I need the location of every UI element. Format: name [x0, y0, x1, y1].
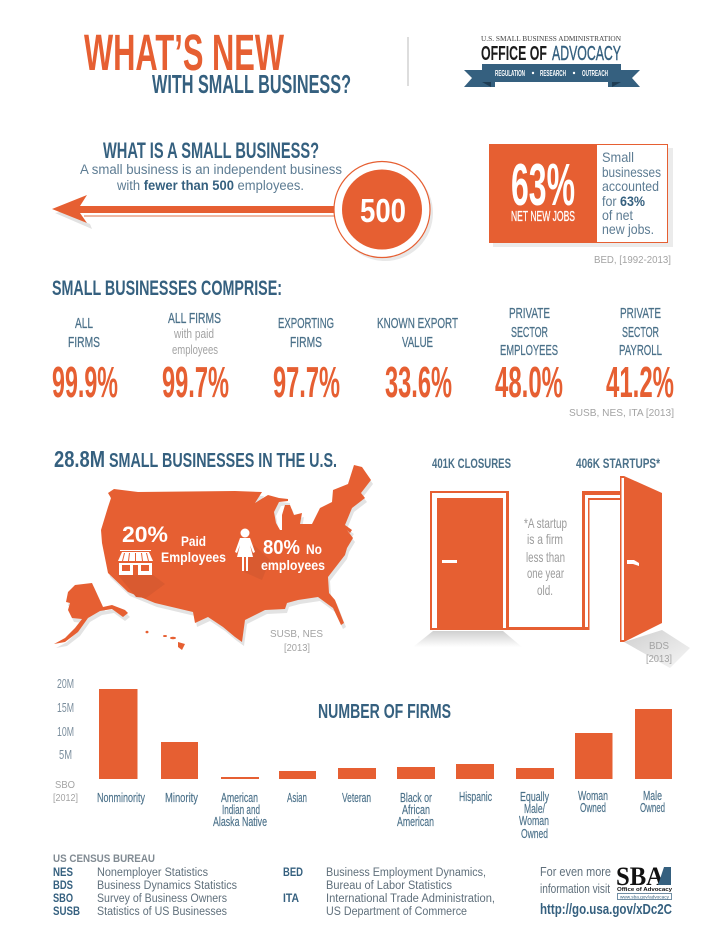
- logo: office of advocacy: [464, 35, 640, 87]
- logo: office of advocacy: OFFICE OF: [481, 43, 547, 65]
- stat: private sector employees: PRIVATE: [509, 305, 550, 322]
- badge: 500: [334, 162, 433, 261]
- stat: all firms: [52, 315, 118, 407]
- glossary: data sources: International Trade Administration,: [326, 893, 495, 905]
- source: BED: BED, [1992-2013]: [594, 254, 671, 266]
- arrow: [52, 195, 336, 229]
- stat card: 63% net new jobs: new jobs.: [602, 221, 654, 237]
- badge: 500: 500: [360, 192, 406, 229]
- floor line: [509, 627, 584, 630]
- category labels: Minority: [165, 790, 198, 805]
- stat: private sector payroll: PAYROLL: [619, 342, 662, 359]
- stat: all firms: 99.9%: [52, 358, 118, 407]
- icon long shadows: [118, 545, 270, 598]
- stat: private sector employees: 48.0%: [495, 358, 563, 407]
- category labels: Hispanic: [459, 789, 492, 804]
- category labels: Male/: [524, 801, 545, 816]
- icon: storefront: [118, 550, 153, 575]
- logo: SBA: Office of Advocacy: [617, 887, 673, 893]
- category labels: Woman: [578, 788, 608, 803]
- category labels: Nonminority: [97, 790, 145, 805]
- label: 20% paid employees: Employees: [161, 550, 226, 565]
- stat: private sector employees: EMPLOYEES: [500, 342, 558, 359]
- glossary: data sources: NES: [53, 865, 73, 879]
- main title: WHAT’S NEW: [84, 24, 285, 81]
- label: 20% paid employees: 20%: [122, 522, 168, 547]
- label: 80% no employees: [261, 537, 325, 573]
- category labels: Owned: [640, 800, 665, 815]
- stat: all firms with paid employees: 99.7%: [162, 358, 229, 407]
- subtitle: WITH SMALL BUSINESS?: [152, 69, 351, 99]
- label: 80% no employees: 80%: [263, 537, 300, 559]
- y axis labels: SBO: [55, 779, 75, 791]
- stat: private sector payroll: SECTOR: [622, 324, 659, 341]
- startup note: one year: [527, 565, 564, 581]
- logo: office of advocacy: RESEARCH: [540, 69, 566, 78]
- more information: information visit: [540, 882, 610, 896]
- stat: all firms with paid employees: [162, 310, 229, 407]
- label: 80% no employees: No: [306, 541, 322, 557]
- stat: known export value: VALUE: [402, 334, 433, 351]
- stat: private sector payroll: PRIVATE: [620, 305, 661, 322]
- glossary: data sources: Statistics of US Businesses: [97, 906, 227, 918]
- startup note: is a firm: [527, 531, 563, 547]
- logo: office of advocacy: U.S. SMALL BUSINESS ADMINISTRATION: [481, 35, 621, 43]
- logo: SBA: [616, 862, 673, 900]
- category labels: Veteran: [342, 790, 371, 805]
- source: BDS: [2013]: [646, 653, 672, 665]
- logo: office of advocacy: REGULATION: [495, 69, 525, 78]
- stat card: 63% net new jobs: accounted: [602, 178, 659, 194]
- map heading: SMALL BUSINESSES IN THE U.S.: [109, 450, 337, 472]
- category labels: Black or: [400, 790, 432, 805]
- y axis labels: 10M: [57, 724, 74, 739]
- category labels: American: [397, 814, 434, 829]
- source: SUSB NES: [270, 628, 323, 654]
- stat card: 63% net new jobs: of net: [602, 207, 633, 223]
- stat: all firms: FIRMS: [68, 334, 100, 351]
- glossary: data sources: ITA: [283, 891, 299, 905]
- more information: http://go.usa.gov/xDc2C: [540, 901, 672, 918]
- what is a small business text: [80, 138, 342, 193]
- glossary: data sources: Business Dynamics Statistics: [97, 880, 237, 892]
- what is a small business text: A small business is an independent business: [80, 162, 342, 177]
- glossary: data sources: [53, 853, 495, 918]
- what is a small business text: with fewer than 500 employees.: [116, 178, 304, 193]
- category labels: Woman: [519, 813, 549, 828]
- stat: exporting firms: FIRMS: [290, 334, 322, 351]
- chart title: NUMBER OF FIRMS: [318, 701, 451, 723]
- category labels: Owned: [521, 826, 548, 841]
- stat card: 63% net new jobs: NET NEW JOBS: [511, 208, 575, 225]
- glossary: data sources: BDS: [53, 878, 73, 892]
- stat: private sector employees: SECTOR: [511, 324, 548, 341]
- hawaii: [146, 631, 185, 650]
- glossary: data sources: SBO: [53, 891, 73, 905]
- open door: [582, 476, 662, 642]
- glossary: data sources: Survey of Business Owners: [97, 893, 227, 905]
- stat: known export value: 33.6%: [385, 358, 452, 407]
- label: 80% no employees: employees: [261, 558, 325, 573]
- closed door: [430, 491, 509, 630]
- category labels: Owned: [580, 800, 606, 815]
- category labels: Alaska Native: [213, 814, 267, 829]
- map heading: 28.8M: [54, 446, 105, 472]
- door labels: 406K STARTUPS*: [576, 455, 660, 471]
- stat: private sector payroll: [606, 305, 674, 407]
- glossary: data sources: Nonemployer Statistics: [97, 867, 208, 879]
- alaska: [54, 583, 128, 644]
- glossary: data sources: BED: [283, 865, 303, 879]
- bars: [99, 689, 672, 779]
- stat: private sector employees: [495, 305, 563, 407]
- glossary: data sources: US CENSUS BUREAU: [53, 853, 155, 865]
- category labels: Equally: [520, 789, 549, 804]
- startup note: old.: [537, 582, 553, 598]
- stat card: 63% net new jobs: businesses: [602, 164, 661, 180]
- stat card: 63% net new jobs: 63%: [511, 152, 575, 218]
- logo: office of advocacy: ADVOCACY: [552, 43, 621, 65]
- logo: office of advocacy: OUTREACH: [582, 69, 608, 78]
- logo: SBA: SBA: [616, 862, 664, 891]
- logo: SBA: www.sba.gov/advocacy: [620, 894, 670, 900]
- stat card: 63% net new jobs: [489, 144, 673, 247]
- door labels: [432, 455, 660, 471]
- glossary: data sources: Business Employment Dynamics,: [326, 867, 486, 879]
- stat card: 63% net new jobs: for 63%: [602, 193, 645, 209]
- source: BDS: BDS: [649, 640, 669, 652]
- y axis labels: 20M: [57, 676, 74, 691]
- stat card: 63% net new jobs: Small: [602, 149, 634, 165]
- startup note: [524, 515, 567, 598]
- stat: all firms: ALL: [75, 315, 93, 332]
- startup note: less than: [526, 549, 565, 565]
- stat: known export value: KNOWN EXPORT: [377, 315, 458, 332]
- y axis labels: 15M: [57, 700, 74, 715]
- stat: exporting firms: 97.7%: [273, 358, 340, 407]
- header title: [84, 24, 351, 99]
- category labels: American: [221, 790, 258, 805]
- category labels: [97, 788, 665, 841]
- stat: all firms with paid employees: ALL FIRMS: [168, 310, 221, 327]
- category labels: Indian and: [222, 802, 260, 817]
- category labels: Asian: [287, 790, 307, 805]
- more information: For even more: [540, 865, 611, 879]
- glossary: data sources: SUSB: [53, 904, 80, 918]
- y axis labels: 5M: [59, 747, 72, 762]
- source: SUSB NES: [2013]: [284, 642, 310, 654]
- source: SUSB NES: SUSB, NES: [270, 628, 323, 640]
- mainland: [101, 465, 371, 642]
- bar chart: number of firms: [53, 676, 672, 841]
- source: SUSB NES ITA: SUSB, NES, ITA [2013]: [569, 407, 674, 419]
- y axis labels: [2012]: [53, 792, 78, 804]
- category labels: Male: [643, 788, 662, 803]
- category labels: African: [402, 802, 430, 817]
- stat: exporting firms: [273, 315, 340, 407]
- stat: known export value: [377, 315, 458, 407]
- icon: woman: [235, 528, 255, 571]
- glossary: data sources: Bureau of Labor Statistics: [326, 880, 452, 892]
- more information: [540, 865, 672, 918]
- label: 20% paid employees: Paid: [181, 534, 206, 549]
- what is a small business text: WHAT IS A SMALL BUSINESS?: [103, 138, 319, 163]
- map: united states: [54, 465, 373, 650]
- stat: all firms with paid employees: with paid: [173, 326, 214, 341]
- label: 20% paid employees: [122, 522, 226, 565]
- startup note: *A startup: [524, 515, 567, 531]
- map shadow: [56, 469, 373, 648]
- y axis labels: [53, 676, 78, 804]
- source: BDS: [646, 640, 672, 665]
- stat: exporting firms: EXPORTING: [278, 315, 334, 332]
- doors: closures and startups: [413, 455, 690, 668]
- door labels: 401K CLOSURES: [432, 455, 511, 471]
- section: small businesses comprise: [52, 277, 674, 419]
- door shadows: [413, 630, 690, 668]
- heading: SMALL BUSINESSES COMPRISE:: [52, 277, 282, 300]
- glossary: data sources: US Department of Commerce: [326, 906, 467, 918]
- stat: all firms with paid employees: employees: [172, 342, 218, 357]
